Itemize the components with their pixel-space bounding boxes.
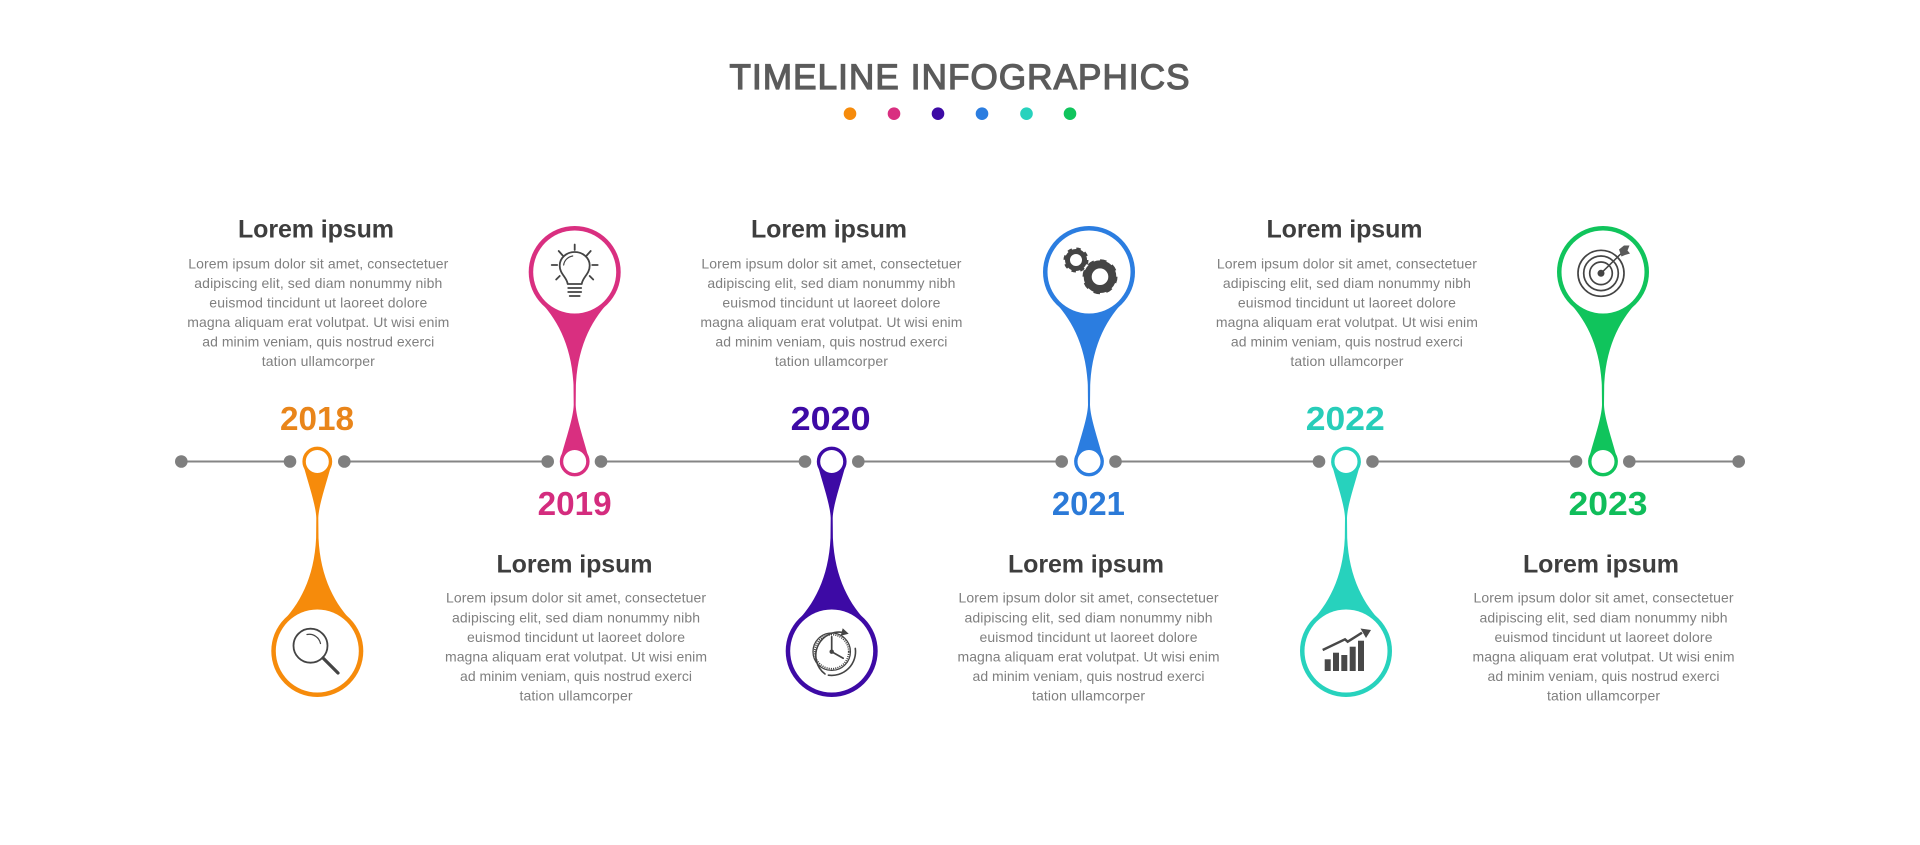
panel: 2022 bbox=[1216, 216, 1478, 697]
text block 2019: adipiscing elit, sed diam nonummy nibh bbox=[452, 609, 700, 625]
text block 2022: ad minim veniam, quis nostrud exerci bbox=[1231, 334, 1463, 350]
text block 2019: magna aliquam erat volutpat. Ut wisi enim bbox=[445, 648, 707, 664]
text block 2020: Lorem ipsum dolor sit amet, consectetuer bbox=[701, 255, 962, 271]
icon: growth chart bbox=[1323, 628, 1371, 671]
text block 2019: Lorem ipsum dolor sit amet, consectetuer bbox=[446, 590, 706, 606]
icon: light bulb bbox=[552, 244, 598, 296]
heading 2020: Lorem ipsum bbox=[751, 216, 907, 244]
text block 2023 bbox=[1472, 590, 1734, 704]
heading 2021: Lorem ipsum bbox=[1008, 550, 1164, 578]
text block 2018: ad minim veniam, quis nostrud exerci bbox=[202, 334, 434, 350]
text block 2023: euismod tincidunt ut laoreet dolore bbox=[1494, 629, 1713, 645]
year 2021: 2021 bbox=[1052, 485, 1125, 522]
text block 2020 bbox=[700, 255, 962, 369]
text block 2020: euismod tincidunt ut laoreet dolore bbox=[722, 294, 941, 310]
heading 2022: Lorem ipsum bbox=[1266, 216, 1422, 244]
text block 2022: tation ullamcorper bbox=[1290, 353, 1404, 369]
heading 2018: Lorem ipsum bbox=[238, 216, 394, 244]
text block 2023: Lorem ipsum dolor sit amet, consectetuer bbox=[1474, 590, 1734, 606]
panel: 2020 bbox=[700, 216, 962, 697]
text block 2020: ad minim veniam, quis nostrud exerci bbox=[715, 334, 947, 350]
text block 2019 bbox=[445, 590, 707, 704]
text block 2021: ad minim veniam, quis nostrud exerci bbox=[972, 668, 1204, 684]
panel: 2018 bbox=[187, 216, 449, 697]
text block 2022: Lorem ipsum dolor sit amet, consectetuer bbox=[1217, 255, 1477, 271]
pin 2018 bbox=[271, 448, 363, 697]
text block 2022: magna aliquam erat volutpat. Ut wisi enim bbox=[1216, 314, 1478, 330]
text block 2018: Lorem ipsum dolor sit amet, consectetuer bbox=[188, 255, 449, 271]
text block 2020: adipiscing elit, sed diam nonummy nibh bbox=[707, 275, 955, 291]
year 2019: 2019 bbox=[538, 485, 612, 522]
text block 2021: magna aliquam erat volutpat. Ut wisi enim bbox=[958, 648, 1220, 664]
pin 2020 bbox=[786, 448, 878, 697]
text block 2021: Lorem ipsum dolor sit amet, consectetuer bbox=[958, 590, 1219, 606]
text block 2019: ad minim veniam, quis nostrud exerci bbox=[460, 668, 692, 684]
icon: clock bbox=[813, 628, 856, 675]
text block 2023: ad minim veniam, quis nostrud exerci bbox=[1488, 668, 1720, 684]
text block 2020: tation ullamcorper bbox=[775, 353, 888, 369]
year 2018: 2018 bbox=[280, 400, 354, 437]
text block 2021 bbox=[958, 590, 1220, 704]
year 2023: 2023 bbox=[1568, 485, 1648, 522]
pin 2021 bbox=[1043, 226, 1135, 475]
icon: gears bbox=[1065, 249, 1116, 292]
year 2020: 2020 bbox=[791, 400, 871, 437]
text block 2019: tation ullamcorper bbox=[520, 688, 633, 704]
heading 2023: Lorem ipsum bbox=[1523, 550, 1679, 578]
text block 2023: magna aliquam erat volutpat. Ut wisi enim bbox=[1472, 648, 1734, 664]
text block 2023: tation ullamcorper bbox=[1547, 688, 1660, 704]
text block 2018: euismod tincidunt ut laoreet dolore bbox=[209, 294, 428, 310]
panel: 2019 bbox=[445, 226, 707, 704]
text block 2022: euismod tincidunt ut laoreet dolore bbox=[1238, 294, 1456, 310]
pin 2022 bbox=[1300, 448, 1392, 697]
pin 2019 bbox=[529, 226, 621, 475]
pin 2023 bbox=[1557, 226, 1649, 475]
panel: 2023 bbox=[1472, 226, 1734, 704]
text block 2020: magna aliquam erat volutpat. Ut wisi enim bbox=[700, 314, 962, 330]
text block 2023: adipiscing elit, sed diam nonummy nibh bbox=[1480, 609, 1728, 625]
year 2022: 2022 bbox=[1306, 400, 1385, 437]
title: TIMELINE INFOGRAPHICS bbox=[730, 58, 1190, 97]
text block 2018 bbox=[187, 255, 449, 369]
text block 2018: tation ullamcorper bbox=[262, 353, 375, 369]
text block 2018: magna aliquam erat volutpat. Ut wisi enim bbox=[187, 314, 449, 330]
title colour dots bbox=[844, 107, 1076, 120]
text block 2021: euismod tincidunt ut laoreet dolore bbox=[980, 629, 1198, 645]
panel: 2021 bbox=[958, 226, 1220, 704]
text block 2021: adipiscing elit, sed diam nonummy nibh bbox=[964, 609, 1212, 625]
text block 2021: tation ullamcorper bbox=[1032, 688, 1145, 704]
icon: magnifier bbox=[294, 629, 338, 673]
icon: target with arrow bbox=[1578, 246, 1630, 296]
heading 2019: Lorem ipsum bbox=[496, 550, 652, 578]
timeline axis with dots bbox=[175, 455, 1745, 468]
text block 2022 bbox=[1216, 255, 1478, 369]
text block 2022: adipiscing elit, sed diam nonummy nibh bbox=[1223, 275, 1471, 291]
text block 2019: euismod tincidunt ut laoreet dolore bbox=[467, 629, 685, 645]
text block 2018: adipiscing elit, sed diam nonummy nibh bbox=[194, 275, 442, 291]
